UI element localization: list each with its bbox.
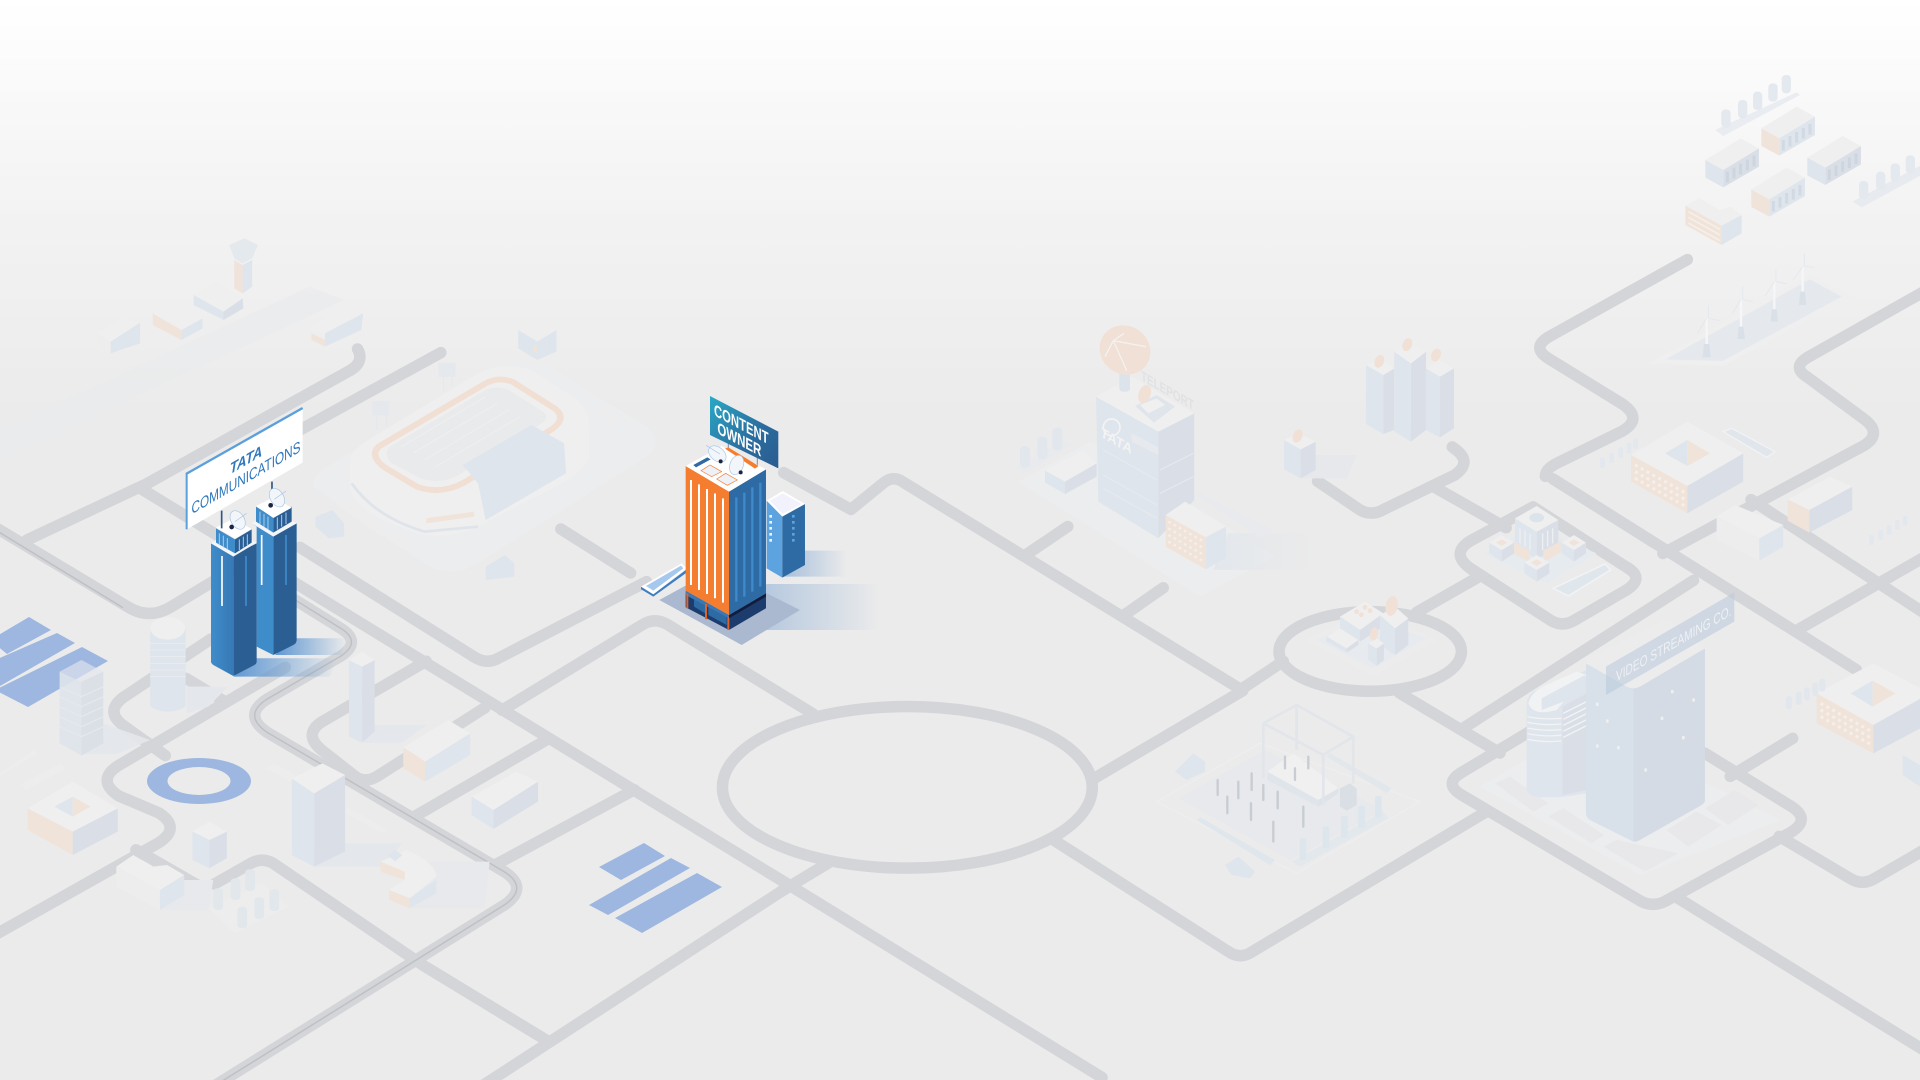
faded teleport district — [1015, 315, 1454, 597]
video streaming sign: VIDEO STREAMING CO. — [1616, 603, 1731, 686]
roadside strips — [0, 750, 65, 790]
faded airport and stadium — [0, 238, 656, 580]
orange block — [1166, 502, 1226, 569]
teleport pad — [1018, 442, 1315, 597]
satellite dishes — [227, 486, 288, 532]
tank rows — [1715, 75, 1920, 207]
rear tower — [252, 521, 297, 655]
floodlights — [373, 363, 455, 430]
triple towers — [1366, 337, 1454, 442]
hangars — [153, 282, 243, 340]
tank farm — [208, 869, 288, 933]
teleport tower — [1096, 377, 1194, 538]
tower — [349, 652, 427, 743]
terminal — [308, 305, 369, 347]
cylinder building — [1527, 670, 1587, 797]
data centre C — [1807, 136, 1861, 185]
content owner sign: OWNER — [717, 418, 761, 461]
tata communications sign — [186, 407, 303, 529]
teleport strip — [1195, 493, 1273, 537]
barriers and tank row — [1197, 753, 1392, 867]
solar panels left — [0, 617, 108, 707]
solar panels centre — [589, 843, 722, 933]
concert ground — [1157, 743, 1420, 873]
ring plaza buildings — [1327, 595, 1408, 666]
orange office — [1788, 477, 1852, 533]
small relay tower — [1284, 428, 1357, 478]
tata communications sign: COMMUNICATIONS — [191, 438, 301, 518]
faded video streaming campus — [1480, 592, 1920, 875]
road network — [0, 260, 1920, 1080]
small block — [192, 822, 227, 868]
central building — [1512, 506, 1562, 563]
faded district: bottom left — [0, 617, 538, 933]
roof — [686, 446, 766, 492]
courtyard slab — [1723, 428, 1775, 457]
tata communications sign: TATA — [230, 443, 262, 478]
roof dishes — [705, 442, 746, 477]
airport block — [97, 317, 140, 353]
faded house cluster — [1483, 506, 1611, 596]
courtyard building — [1631, 422, 1743, 513]
block blue — [472, 772, 538, 829]
stadium slabs — [336, 407, 623, 551]
faded ring plaza and concert district — [1157, 595, 1437, 878]
sign poles — [728, 440, 757, 466]
tanks and annex — [1015, 428, 1097, 494]
front tower — [211, 540, 257, 676]
parking trucks — [315, 510, 514, 580]
data centre D — [1751, 168, 1805, 217]
cylinder tower — [150, 617, 228, 713]
orange facade — [686, 466, 729, 615]
house slab — [1553, 564, 1611, 596]
tanks — [1600, 438, 1907, 545]
block orange — [403, 720, 470, 782]
office block — [116, 855, 213, 910]
video streaming sign — [1606, 592, 1734, 695]
ground floor — [686, 591, 766, 630]
teleport lettering: TELEPORT — [1141, 367, 1194, 413]
cluster pad — [1483, 527, 1597, 583]
blue facade — [729, 469, 766, 615]
front tower crown — [216, 518, 252, 553]
small pavilion — [518, 330, 556, 360]
pods — [1489, 535, 1586, 582]
content owner building — [641, 396, 880, 645]
vans — [1175, 753, 1255, 878]
ring plaza — [147, 758, 251, 804]
data centre A — [1761, 107, 1815, 156]
small east block — [1903, 755, 1920, 787]
rear tower crown — [256, 497, 292, 533]
wind turbine pad — [1657, 277, 1847, 363]
concert stage — [1263, 705, 1357, 811]
content owner sign: CONTENT — [714, 400, 769, 448]
concert crowd — [1218, 757, 1308, 842]
side building — [767, 491, 805, 578]
tata logo on tower: TATA — [1101, 425, 1132, 459]
office block — [1717, 505, 1783, 561]
wind turbines — [1697, 253, 1815, 345]
faded east buildings — [1600, 422, 1907, 561]
curved building — [380, 850, 490, 908]
tata communications towers — [186, 407, 347, 677]
courtyard building — [28, 782, 118, 855]
hotel tower — [266, 763, 402, 867]
ring plaza pad — [1307, 608, 1437, 677]
campus lot — [1480, 723, 1780, 875]
stadium — [313, 362, 656, 572]
roof dishes — [1090, 315, 1175, 423]
faded energy district — [1657, 75, 1920, 363]
turbine bases — [1703, 292, 1806, 357]
content owner sign — [710, 396, 778, 468]
tall tower west — [60, 660, 150, 756]
sign poles — [222, 482, 272, 528]
runway — [0, 287, 344, 460]
data centre E — [1685, 198, 1742, 245]
tower shadows — [233, 638, 347, 677]
entrance slab — [641, 563, 687, 597]
data centre B — [1705, 138, 1759, 187]
main tower — [1586, 620, 1705, 842]
courtyard building east — [1786, 663, 1920, 753]
building shadows — [659, 551, 880, 645]
control tower — [229, 238, 258, 293]
